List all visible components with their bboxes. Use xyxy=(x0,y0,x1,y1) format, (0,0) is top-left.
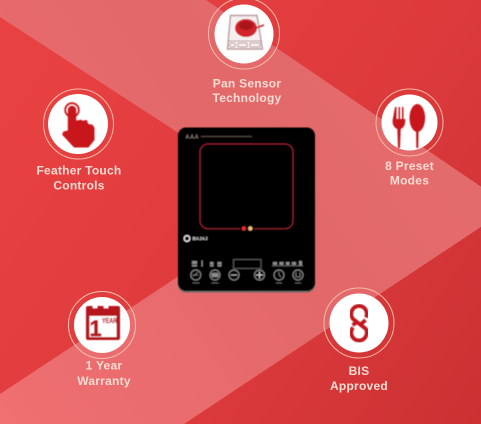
feature: 1 year warranty xyxy=(68,292,136,388)
label xyxy=(385,159,434,188)
label xyxy=(36,164,122,192)
badge ring xyxy=(208,0,280,69)
label: BIS xyxy=(349,364,369,378)
top marks: A.A.A xyxy=(186,134,199,140)
badge ring xyxy=(376,89,443,156)
icon: calendar: YEAR xyxy=(102,318,117,325)
label: 8 Preset xyxy=(385,159,434,173)
label: Feather Touch xyxy=(36,164,122,178)
badge disc xyxy=(382,94,438,150)
label: Pan Sensor xyxy=(213,76,281,90)
label xyxy=(213,76,282,105)
control buttons xyxy=(191,270,303,280)
brand logo: BAJAJ xyxy=(192,236,208,241)
label xyxy=(330,364,388,393)
badge disc xyxy=(330,294,388,352)
label xyxy=(77,358,131,388)
icon: BIS mark xyxy=(351,306,367,341)
timer display xyxy=(234,260,261,268)
icon: calendar xyxy=(86,306,120,341)
icon: calendar: 1 xyxy=(89,316,102,341)
label: Warranty xyxy=(77,374,131,388)
badge ring xyxy=(44,89,114,159)
brand logo xyxy=(184,236,208,241)
label: Modes xyxy=(390,174,429,188)
feature: pan sensor technology xyxy=(208,0,282,105)
badge disc xyxy=(74,297,130,353)
icon: fork and spoon xyxy=(392,104,425,148)
feature: feather touch controls xyxy=(36,89,122,192)
badge disc xyxy=(48,94,108,154)
mode icons left xyxy=(192,260,222,266)
label: Controls xyxy=(53,178,105,192)
icon: cooktop with pan xyxy=(228,16,264,49)
feature: 8 preset modes xyxy=(376,89,443,188)
feature: BIS approved xyxy=(324,288,394,393)
indicator dots xyxy=(242,226,252,231)
badge ring xyxy=(68,292,136,358)
top marks xyxy=(186,134,252,140)
cooking zone outline xyxy=(200,144,293,229)
button captions xyxy=(192,282,301,284)
icon: pointing hand xyxy=(62,103,95,148)
product: induction cooktop xyxy=(178,128,315,292)
cooktop bottom edge xyxy=(178,240,315,292)
badge ring xyxy=(324,288,394,358)
cooktop body xyxy=(178,128,315,291)
label: Approved xyxy=(330,379,388,393)
mode icons right xyxy=(272,261,303,266)
label: Technology xyxy=(213,91,282,105)
label: 1 Year xyxy=(86,358,122,372)
badge disc xyxy=(214,4,274,64)
